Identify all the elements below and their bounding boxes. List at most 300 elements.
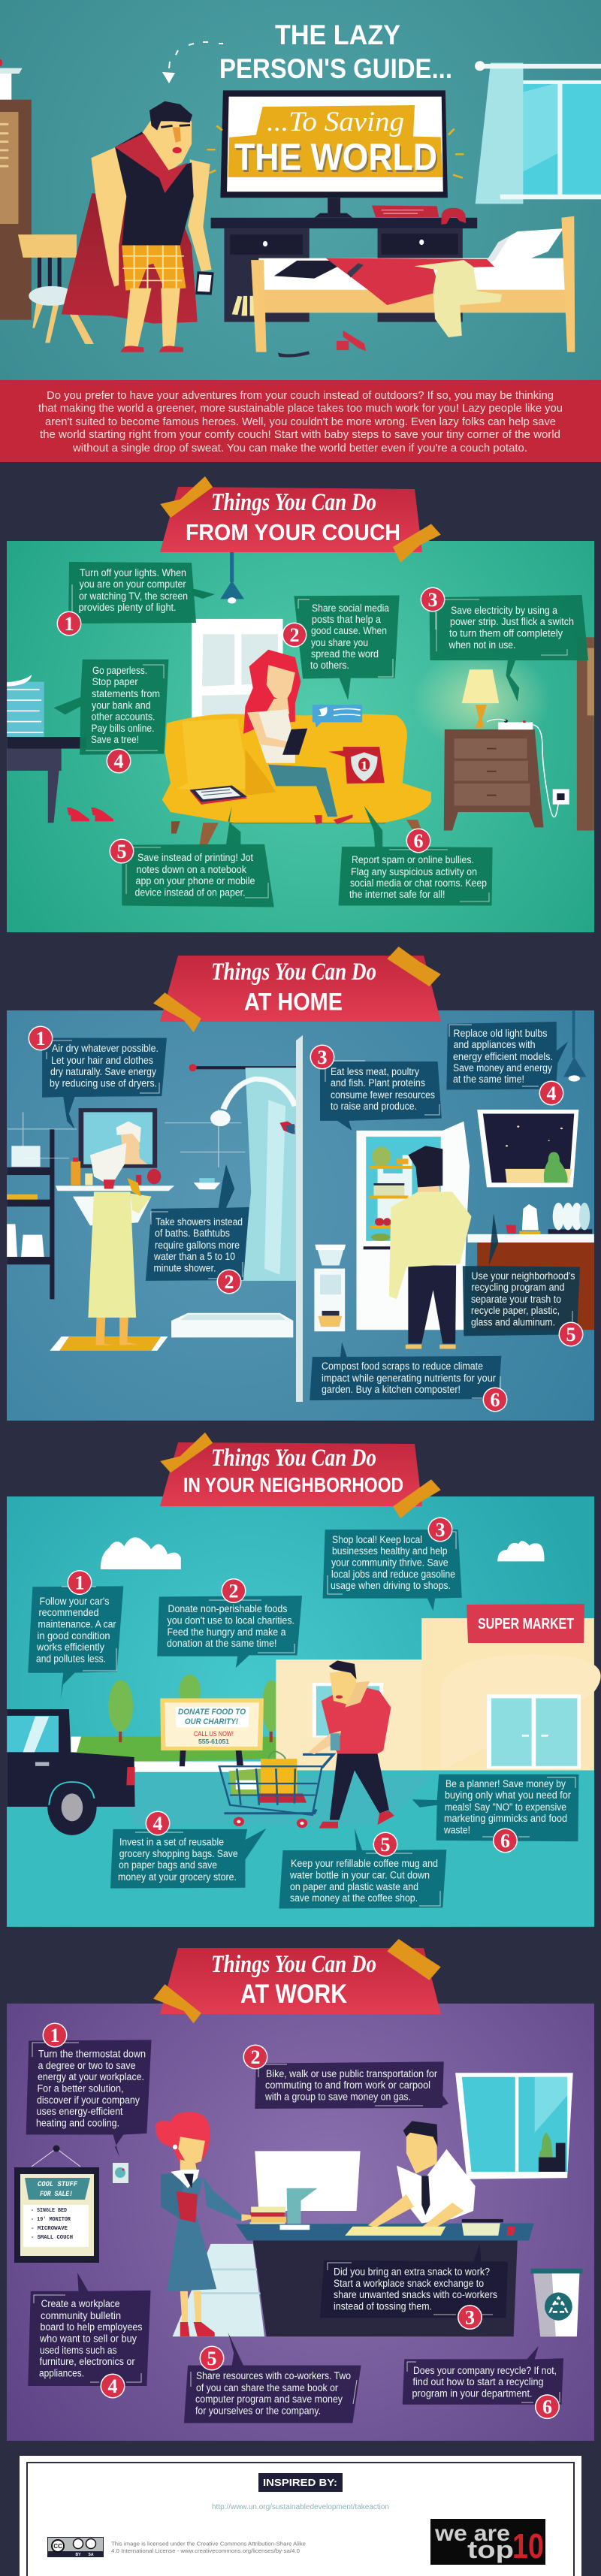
callout 3: [421, 587, 588, 702]
inspired by label: INSPIRED BY:: [263, 2477, 337, 2488]
tablet: [282, 729, 307, 755]
callout 4: Pay bills online.: [92, 723, 155, 734]
intro text: without a single drop of sweat. You can make the world better even if you're a couch potato.: [72, 442, 527, 454]
license text: This image is licensed under the Creative Commons Attribution-Share Alike: [111, 2541, 306, 2547]
callout 3: Shop local! Keep local: [332, 1534, 422, 1545]
callout 5: glass and aluminum.: [471, 1316, 555, 1328]
callout 6: 6: [542, 2396, 552, 2418]
callout 1: recommended: [39, 1607, 99, 1618]
shoes: [314, 814, 352, 824]
callout 2: [157, 1578, 302, 1680]
panel: at home: [7, 947, 594, 1421]
logo: we are top 10: [430, 2519, 545, 2565]
neck and face: [143, 121, 192, 172]
window and curtain: [475, 61, 601, 204]
heading ribbon: from your couch: Things You Can Do: [211, 489, 376, 516]
callout 4: Invest in a set of reusable: [119, 1836, 224, 1848]
divider wall: [296, 1035, 303, 1402]
callout 2 text and number: good cause. When: [311, 625, 387, 636]
callout 4: used items such as: [40, 2345, 117, 2356]
home panel background: [7, 1010, 594, 1421]
callout 3: Start a workplace snack exchange to: [334, 2278, 484, 2289]
callout 6: Flag any suspicious activity on: [351, 866, 477, 877]
logo: we are top 10: 10: [512, 2526, 544, 2565]
nightstand and lamp: [412, 648, 569, 831]
left arm: [91, 146, 126, 287]
hair: [149, 101, 192, 130]
trees: [119, 1724, 122, 1742]
callout 2: 2: [251, 2046, 260, 2068]
callout 3: Save electricity by using a: [451, 605, 557, 616]
heading ribbon: in your neighborhood: Things You Can Do: [211, 1445, 376, 1472]
callout 2 text and number: posts that help a: [312, 614, 381, 625]
jeans: [268, 765, 337, 817]
callout 6: marketing gimmicks and food: [444, 1813, 567, 1824]
callout 3: Eat less meat, poultry: [331, 1066, 419, 1077]
callout 5: [184, 2333, 361, 2423]
icon: dashed arrow: [162, 42, 223, 83]
callout 2: commuting to and from work or carpool: [265, 2079, 430, 2091]
callout 2: you don't use to local charities.: [167, 1615, 294, 1626]
callout 2: minute shower.: [153, 1262, 216, 1274]
callout 1: works efficiently: [36, 1641, 104, 1653]
callout 4: [446, 1022, 568, 1106]
heading ribbon: at work: [153, 1939, 441, 2023]
character: man at fridge: [389, 1146, 472, 1349]
callout 3: to raise and produce.: [331, 1101, 417, 1112]
callout 5: device instead of on paper.: [135, 886, 245, 898]
charity sign: CALL US NOW!: [194, 1730, 234, 1738]
callout 6: buying only what you need for: [445, 1789, 571, 1801]
slippers: [121, 346, 183, 352]
footer card: [20, 2456, 581, 2576]
callout 6: [403, 2346, 563, 2419]
water cooler: [316, 1245, 345, 1265]
couch room scene behind callouts: [7, 551, 594, 831]
door: [192, 619, 283, 720]
callout 3: [320, 2244, 508, 2330]
desk with console: [211, 198, 477, 322]
TV with title screen: [207, 90, 464, 198]
callout 2: Donate non-perishable foods: [168, 1603, 288, 1614]
panel: introduction: [0, 380, 601, 462]
callout 6: program in your department.: [412, 2387, 532, 2399]
shower: [192, 1066, 297, 1069]
callout 6: [310, 1342, 508, 1412]
heading ribbon: at home: Things You Can Do: [211, 959, 376, 986]
character: woman on couch: [243, 650, 352, 824]
callout 5: Save instead of printing! Jot: [137, 852, 253, 863]
sparkle lines: [8, 1109, 246, 1167]
header wall background: [0, 0, 601, 381]
bath mat: [50, 1336, 168, 1351]
character: woman with book: [156, 2112, 251, 2336]
callout 4: Replace old light bulbs: [454, 1028, 548, 1039]
callout 1: in good condition: [38, 1630, 110, 1641]
callout 3: [323, 1518, 462, 1611]
callout 4: other accounts.: [92, 711, 155, 723]
office scene: [173, 2073, 583, 2336]
supermarket: [421, 1618, 594, 1771]
logo: we are top 10: we are: [434, 2521, 510, 2546]
callout 4: appliances.: [39, 2368, 84, 2379]
callout 3: consume fewer resources: [331, 1089, 435, 1101]
callout 5: computer program and save money: [195, 2393, 343, 2405]
callout 3: usage when driving to shops.: [331, 1580, 451, 1591]
heading ribbon: at home: AT HOME: [244, 989, 343, 1016]
panel: at work: [7, 1939, 594, 2441]
callout 1: 1: [50, 2025, 60, 2046]
callout 1: [57, 562, 215, 636]
callout 2: Feed the hungry and make a: [167, 1626, 286, 1638]
couch panel background: [7, 541, 594, 932]
bulletin board: FOR SALE!: [40, 2191, 73, 2199]
callout 1: or watching TV, the screen: [79, 590, 188, 602]
street: [7, 1771, 594, 1926]
subtitle: ...To Saving: [267, 107, 404, 137]
callout 2 text and number: 2: [290, 624, 299, 646]
callout 6: Report spam or online bullies.: [352, 854, 474, 865]
callout 4: 4: [108, 2375, 117, 2397]
callout 3: 3: [436, 1519, 445, 1541]
panel: footer credits: [20, 2456, 581, 2576]
ceiling lamp: [572, 1010, 575, 1058]
callout 1: uses energy-efficient: [36, 2106, 123, 2117]
icon: thermostat: [113, 2163, 128, 2183]
main title shadow: THE WORLD: [236, 138, 439, 180]
callout 5: water bottle in your car. Cut down: [289, 1869, 430, 1881]
callout 2 text and number: Share social media: [312, 602, 389, 614]
callout 5: on paper and plastic waste and: [290, 1881, 418, 1892]
callout 1: and pollutes less.: [36, 1653, 106, 1665]
callout 2: 2: [224, 1271, 234, 1293]
inspired by label: [258, 2473, 343, 2492]
callout 6: [412, 1774, 578, 1853]
callout 4: at the same time!: [453, 1074, 524, 1085]
face: [267, 665, 295, 702]
right arm: [188, 159, 212, 271]
callout 5: [463, 1213, 583, 1346]
panel: header scene: [0, 0, 601, 381]
callout 6: [339, 806, 493, 906]
callout 2: of baths. Bathtubs: [155, 1228, 230, 1239]
callout 3: 3: [428, 589, 437, 611]
desk body: [253, 2240, 518, 2336]
man at desk: [397, 2149, 476, 2223]
supermarket sign: [467, 1604, 584, 1643]
kitchen counter: [477, 1243, 594, 1330]
callout 3: when not in use.: [448, 639, 515, 651]
callout 5: for yourselves or the company.: [195, 2405, 321, 2416]
bathtub: [171, 1313, 293, 1337]
callout 1: provides plenty of light.: [79, 602, 177, 613]
legs: [125, 288, 152, 346]
keyboard: [345, 2227, 445, 2236]
icon: tablet on couch: [190, 786, 247, 805]
callout 5: Share resources with co-workers. Two: [196, 2370, 351, 2381]
bulletin board: [14, 2146, 99, 2263]
counter: [56, 1185, 174, 1191]
callout 6: the internet safe for all!: [349, 889, 445, 900]
night window: [477, 1110, 578, 1187]
callout 5: separate your trash to: [471, 1294, 561, 1305]
callout 2: [146, 1164, 249, 1294]
callout 5: 5: [566, 1324, 575, 1345]
shelves: [50, 1129, 54, 1299]
intro text: that making the world a greener, more sustainable place takes too much work for you! Lazy people like you: [38, 402, 563, 415]
intro text: aren't suited to become famous heroes. Well, you couldn't be more wrong. Even lazy folks can help save: [45, 415, 556, 428]
callout 5: Keep your refillable coffee mug and: [291, 1858, 438, 1869]
callout 4: statements from: [92, 688, 160, 699]
callout 2 text and number: to others.: [310, 660, 349, 671]
callout 5: notes down on a notebook: [137, 864, 246, 875]
bulletin board: - SINGLE BED: [31, 2208, 67, 2214]
callout 5: app on your phone or mobile: [135, 875, 255, 886]
callout 6: social media or chat rooms. Keep: [350, 877, 487, 889]
callout 5: of you can share the same book or: [196, 2382, 338, 2393]
recycling bin: [533, 2272, 579, 2336]
bulletin board: - MICROWAVE: [31, 2226, 68, 2232]
callout 1: [29, 1026, 167, 1129]
heading ribbon: at work: AT WORK: [240, 1980, 347, 2009]
window: [455, 2073, 573, 2179]
cape: [62, 193, 198, 324]
character: man shopping: [309, 1660, 394, 1829]
callout 4: community bulletin: [41, 2310, 121, 2321]
monitor: [255, 2151, 361, 2211]
icon: twitter bubble: [313, 705, 362, 728]
callout 6: Be a planner! Save money by: [445, 1778, 566, 1789]
callout 4: grocery shopping bags. Save: [119, 1848, 238, 1859]
callout 3: and fish. Plant proteins: [331, 1077, 425, 1089]
callout 4: Save money and energy: [453, 1062, 552, 1074]
callout 2: 2: [228, 1581, 239, 1602]
creative commons badge: SA: [89, 2553, 94, 2557]
callout 4: Go paperless.: [92, 665, 147, 676]
callout 1: 1: [36, 1028, 45, 1049]
callout 4: who want to sell or buy: [39, 2333, 137, 2344]
callout 3: 3: [465, 2306, 475, 2329]
heading ribbon: at work: Things You Can Do: [211, 1951, 376, 1978]
callout 6: garden. Buy a kitchen composter!: [322, 1384, 461, 1395]
callout 4: 4: [114, 750, 123, 772]
callout 2: Take showers instead: [156, 1216, 243, 1228]
callout 4: [28, 2272, 151, 2398]
callout 1: Let your hair and clothes: [51, 1055, 153, 1066]
callout 5: recycling program and: [472, 1282, 565, 1293]
callout 3: to turn them off completely: [449, 628, 563, 639]
creative commons badge: BY: [76, 2553, 81, 2557]
callout 4: 4: [547, 1083, 556, 1104]
neighborhood scene: [7, 1537, 601, 1926]
drawers: [173, 2244, 264, 2336]
top: [249, 709, 295, 763]
callout 2 text and number: spread the word: [311, 648, 379, 660]
charity sign: DONATE FOOD TO: [178, 1708, 246, 1717]
icon: report shield: [328, 747, 385, 784]
callout 1: dry naturally. Save energy: [50, 1066, 156, 1077]
icon: report shield: 1: [361, 759, 368, 772]
callout 6: 6: [490, 1389, 500, 1411]
headboard: [577, 637, 594, 831]
callout 4: furniture, electronics or: [39, 2356, 135, 2367]
callout 4: [53, 660, 168, 774]
charity sign: 555-61051: [198, 1738, 230, 1745]
supermarket sign: SUPER MARKET: [478, 1616, 574, 1632]
callout 1: Turn off your lights. When: [80, 567, 186, 578]
neighborhood panel background: [7, 1496, 594, 1927]
callout 1: [28, 1570, 123, 1699]
clouds: [101, 1537, 181, 1569]
intro text: Do you prefer to have your adventures from your couch instead of outdoors? If so, you may be thinking: [47, 389, 554, 402]
bulletin board: - SMALL COUCH: [31, 2235, 73, 2241]
fridge: [356, 1122, 470, 1330]
callout 5: 5: [117, 841, 126, 862]
torso: [115, 132, 194, 246]
callout 4: 4: [153, 1813, 162, 1835]
panel: in your neighborhood: [7, 1433, 601, 1927]
callout 3: Did you bring an extra snack to work?: [334, 2266, 490, 2278]
callout 2: [243, 2045, 448, 2109]
ceiling lamp: [230, 551, 234, 582]
hair: [243, 650, 301, 734]
callout 4: Save a tree!: [91, 734, 139, 745]
callout 6: Compost food scraps to reduce climate: [322, 1360, 483, 1372]
icon: shopping cart: [219, 1751, 334, 1828]
callout 4: Stop paper: [92, 676, 138, 687]
header illustration: bookcase and chair: [0, 59, 94, 344]
callout 3: share unwanted snacks with co-workers: [334, 2289, 497, 2300]
callout 6: Does your company recycle? If not,: [413, 2365, 557, 2376]
heading ribbon: in your neighborhood: IN YOUR NEIGHBORHOOD: [183, 1473, 403, 1496]
charity sign: OUR CHARITY!: [185, 1717, 238, 1726]
callout 3: instead of tossing them.: [334, 2301, 432, 2312]
callout 2 background: [294, 595, 400, 700]
callout 2: water than a 5 to 10: [153, 1251, 235, 1262]
heading ribbon: from your couch: [160, 476, 441, 563]
callout 4: Create a workplace: [41, 2298, 120, 2309]
callout 3: your community thrive. Save: [331, 1557, 448, 1569]
callout 3: businesses healthy and help: [332, 1545, 448, 1557]
callout 4: energy efficient models.: [453, 1051, 553, 1062]
license text: [111, 2541, 306, 2554]
kitchen scene: [314, 1010, 594, 1331]
desk top: [236, 2223, 534, 2240]
phone: [195, 271, 214, 295]
callout 5: recycle paper, plastic,: [471, 1305, 560, 1316]
callout 4: board to help employees: [41, 2321, 143, 2333]
heels: [67, 808, 113, 821]
charity sign: [160, 1699, 264, 1766]
intro text: [38, 389, 563, 454]
callout 2 text and number: [282, 599, 393, 677]
lawn: [77, 1737, 276, 1764]
callout 1: heating and cooling.: [36, 2118, 119, 2129]
intro band: [0, 380, 601, 462]
left building: [276, 1659, 422, 1771]
callout 2 text and number: you share you: [311, 637, 368, 648]
callout 3: 3: [317, 1046, 328, 1068]
callout 1: For a better solution,: [38, 2082, 123, 2094]
callout 1: energy at your workplace.: [38, 2071, 144, 2082]
callout 1: Air dry whatever possible.: [52, 1043, 159, 1054]
callout 1: Turn the thermostat down: [38, 2048, 146, 2059]
callout 6: 6: [413, 830, 424, 852]
callout 4: [110, 1810, 267, 1889]
creative commons badge: [47, 2537, 104, 2557]
callout 1: [26, 2022, 152, 2158]
callout 4: and appliances with: [454, 1039, 535, 1050]
license text: 4.0 International License - www.creativecommons.org/licenses/by-sa/4.0: [111, 2547, 300, 2554]
callout 1: a degree or two to save: [38, 2060, 135, 2071]
character: tired superhero: [62, 101, 214, 352]
eyes and mouth: [161, 125, 190, 127]
callout 2: with a group to save money on gas.: [264, 2091, 411, 2102]
callout 2: donation at the same time!: [167, 1638, 276, 1649]
source url: http://www.un.org/sustainabledevelopment/takeaction: [212, 2503, 389, 2511]
shorts: [122, 246, 186, 291]
intro text: the world starting right from your comfy couch! Start with baby steps to save your tiny corner of the world: [40, 428, 560, 441]
callout 6: waste!: [443, 1825, 470, 1836]
callout 6: meals! Say "NO" to expensive: [445, 1801, 566, 1813]
bulletin board: - 19' MONITOR: [31, 2217, 71, 2223]
desk: [7, 749, 62, 771]
heading ribbon: at home: [153, 947, 441, 1032]
callout 1: you are on your computer: [80, 578, 186, 590]
callout 4: your bank and: [92, 700, 150, 711]
callout 3: local jobs and reduce gasoline: [331, 1569, 455, 1580]
heading ribbon: from your couch: FROM YOUR COUCH: [186, 519, 400, 545]
character: woman in robe: [88, 1143, 152, 1345]
bulletin board: COOL STUFF: [38, 2181, 78, 2189]
truck: [7, 1709, 135, 1807]
callout 6: impact while generating nutrients for your: [322, 1373, 496, 1384]
logo: we are top 10: top: [467, 2536, 514, 2563]
callout 3: [310, 1044, 442, 1131]
callout 1: by reducing use of dryers.: [50, 1077, 157, 1089]
callout 5: save money at the coffee shop.: [290, 1892, 418, 1904]
callout 1: discover if your company: [37, 2094, 140, 2106]
callout 3: power strip. Just flick a switch: [450, 616, 574, 627]
mirror: [79, 1108, 157, 1168]
callout 1: maintenance. A car: [38, 1618, 116, 1630]
callout 2: require gallons more: [155, 1240, 240, 1251]
bathroom scene: [7, 1064, 297, 1351]
illustration: couch: [162, 714, 431, 846]
books: [251, 2206, 285, 2212]
callout 5: [110, 806, 274, 907]
callout 4: money at your grocery store.: [118, 1871, 237, 1883]
callout 5: [279, 1829, 446, 1909]
callout 1: 1: [65, 613, 74, 635]
callout 2: Bike, walk or use public transportation for: [266, 2068, 437, 2079]
title line 2: PERSON'S GUIDE...: [219, 53, 452, 84]
work panel background: [7, 2004, 594, 2441]
callout 5: Use your neighborhood's: [472, 1270, 575, 1282]
creative commons badge: CC: [53, 2543, 62, 2550]
title line 1: THE LAZY: [275, 20, 400, 50]
callout 4: on paper bags and save: [119, 1859, 217, 1871]
callout 6: find out how to start a recycling: [413, 2376, 544, 2387]
callout 6: 6: [500, 1830, 510, 1852]
callout 1: Follow your car's: [39, 1596, 110, 1607]
callout 1: 1: [75, 1572, 84, 1594]
bed: [251, 216, 575, 358]
main title: THE WORLD: [234, 136, 437, 178]
paper stack: [7, 682, 44, 737]
panel: from your couch: [7, 476, 594, 932]
callout 5: 5: [207, 2348, 216, 2369]
